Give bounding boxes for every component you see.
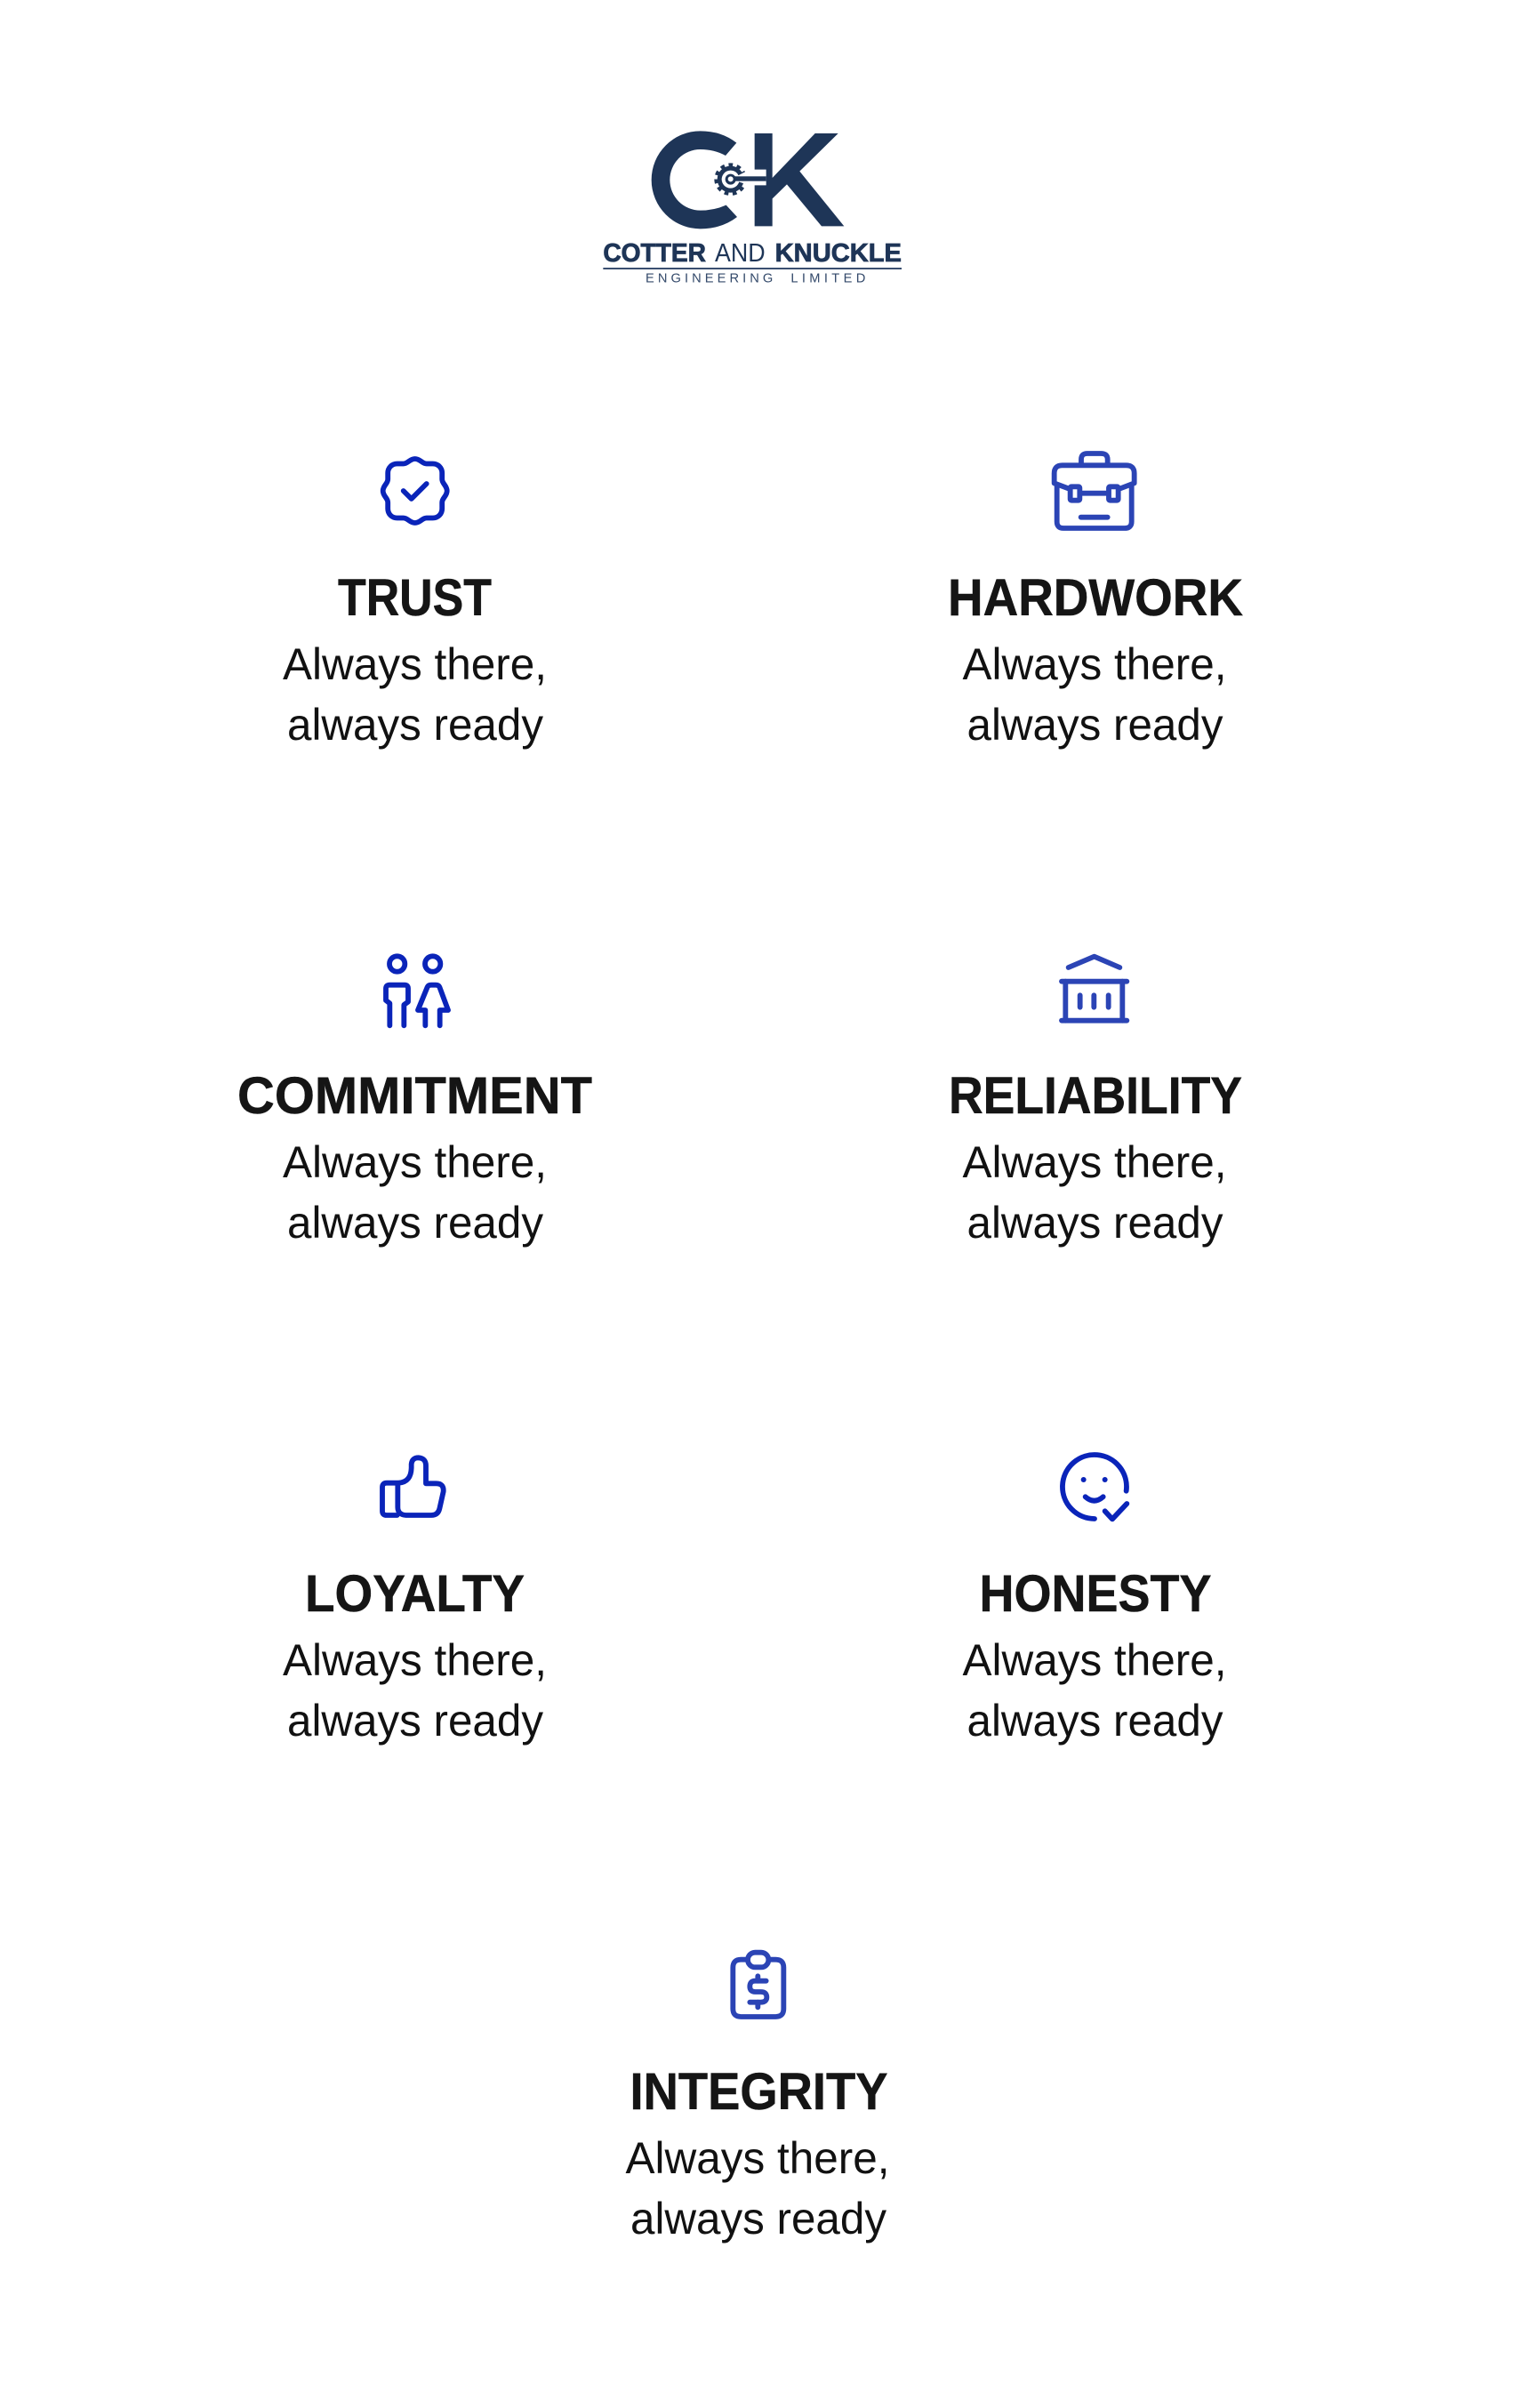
panel: integrity — [626, 1953, 889, 2243]
heading: honesty: HONESTY — [980, 1565, 1211, 1623]
heading: hardwork: HARDWORK — [948, 569, 1243, 627]
panel: reliability — [949, 957, 1242, 1248]
panel: trust — [283, 459, 547, 750]
tagline: LIMITED — [790, 272, 865, 286]
company name: AND — [715, 239, 766, 268]
text: honesty tagline — [962, 1635, 1227, 1746]
text: commitment tagline — [283, 1137, 547, 1248]
text: loyalty tagline: always ready — [287, 1696, 543, 1746]
panel: commitment — [237, 956, 592, 1248]
text: commitment tagline: always ready — [287, 1198, 543, 1248]
company name — [603, 239, 902, 268]
icon: badge check — [383, 459, 447, 523]
heading: trust: TRUST — [338, 569, 492, 627]
text: loyalty tagline: Always there, — [283, 1635, 547, 1685]
text: trust tagline: Always there, — [283, 639, 547, 689]
logo: Cotter and Knuckle — [603, 131, 902, 286]
text: reliability tagline: Always there, — [962, 1137, 1227, 1187]
panel: honesty — [962, 1455, 1227, 1746]
panel: hardwork — [948, 454, 1243, 750]
text: hardwork tagline: always ready — [967, 700, 1223, 750]
icon: bank building — [1062, 957, 1127, 1021]
icon: people — [386, 956, 448, 1025]
icon: clipboard dollar — [733, 1953, 783, 2017]
heading: reliability: RELIABILITY — [949, 1067, 1242, 1125]
text: hardwork tagline — [962, 639, 1227, 750]
heading: loyalty: LOYALTY — [305, 1565, 525, 1623]
tagline — [646, 272, 865, 286]
text: trust tagline — [283, 639, 547, 750]
text: reliability tagline — [962, 1137, 1227, 1248]
text: trust tagline: always ready — [287, 700, 543, 750]
text: reliability tagline: always ready — [967, 1198, 1223, 1248]
text: honesty tagline: Always there, — [962, 1635, 1227, 1685]
icon: briefcase — [1055, 454, 1135, 528]
text: integrity tagline: always ready — [630, 2194, 886, 2243]
text: integrity tagline: Always there, — [626, 2133, 889, 2183]
company name: COTTER — [603, 239, 706, 268]
text: hardwork tagline: Always there, — [962, 639, 1227, 689]
heading: commitment: COMMITMENT — [237, 1067, 592, 1125]
text: integrity tagline — [626, 2133, 889, 2243]
tagline: ENGINEERING — [646, 272, 773, 286]
heading: integrity: INTEGRITY — [630, 2063, 887, 2121]
text: commitment tagline: Always there, — [283, 1137, 547, 1187]
text: loyalty tagline — [283, 1635, 547, 1746]
text: honesty tagline: always ready — [967, 1696, 1223, 1746]
panel: loyalty — [283, 1457, 547, 1746]
icon: thumbs up — [382, 1457, 444, 1515]
logo mark: CK with gear — [652, 131, 844, 229]
icon: smiley check — [1063, 1455, 1127, 1519]
company name: KNUCKLE — [775, 239, 902, 268]
